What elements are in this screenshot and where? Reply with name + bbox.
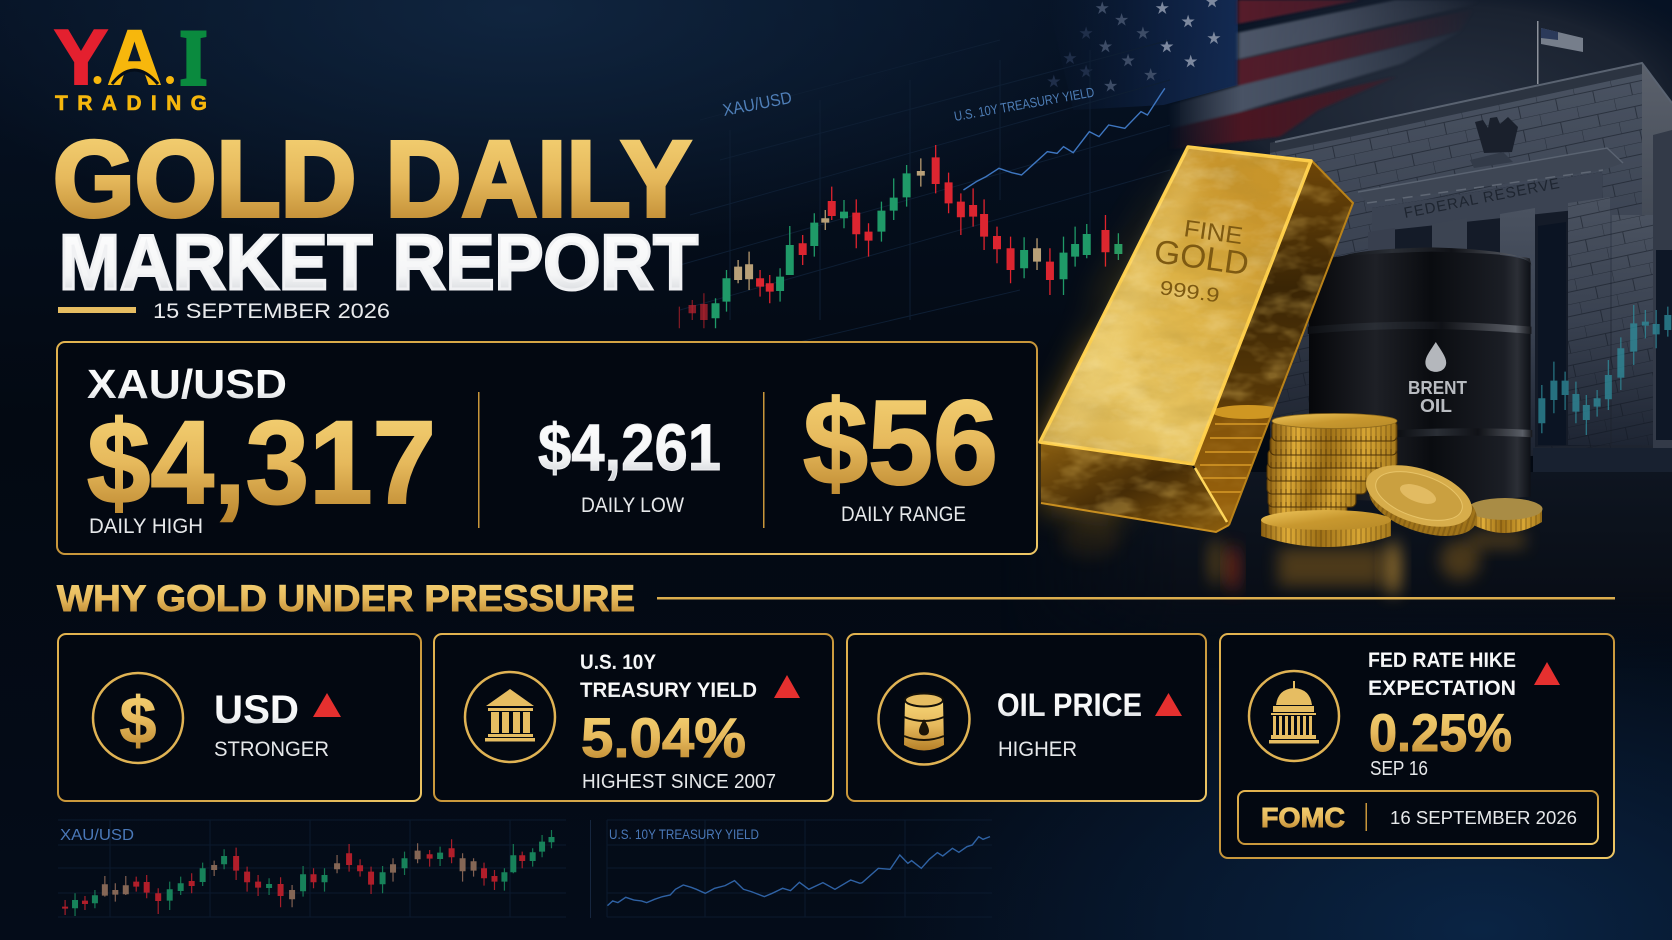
american flag backdrop	[1048, 0, 1672, 154]
flat front coin	[1261, 510, 1391, 547]
mini chart: XAU/USD	[58, 820, 566, 917]
small flag on roof	[1537, 21, 1583, 84]
higher label: HIGHER	[998, 738, 1077, 761]
divider 2	[763, 392, 764, 528]
yield value: 5.04%	[581, 706, 746, 769]
icon: barrel	[878, 674, 970, 764]
card: oil price	[847, 634, 1206, 801]
bar side face	[1193, 160, 1353, 528]
eagle statue	[1470, 117, 1518, 168]
candles	[65, 830, 551, 916]
daily low label: DAILY LOW	[581, 494, 684, 517]
yield line	[607, 837, 990, 906]
background chart: yield line	[963, 88, 1165, 190]
chart title: XAU/USD	[60, 827, 134, 844]
daily high label: DAILY HIGH	[89, 515, 203, 538]
portico	[1358, 148, 1672, 450]
card: USD	[58, 634, 421, 801]
gold coin stack	[1267, 414, 1397, 516]
icon: capitol	[1249, 671, 1339, 761]
chart title: U.S. 10Y TREASURY YIELD	[609, 826, 759, 842]
barrel label	[1408, 378, 1467, 416]
faded left candles	[679, 293, 704, 328]
logo: Y.A.I Trading: Y	[54, 13, 108, 101]
yield heading: TREASURY YIELD	[580, 679, 757, 702]
card: treasury yield	[434, 634, 833, 801]
oil barrel	[1308, 247, 1532, 502]
chart label: treasury yield: U.S. 10Y TREASURY YIELD	[953, 84, 1096, 124]
logo: Y.A.I Trading: A	[107, 13, 162, 101]
background chart: grid	[680, 40, 1170, 370]
daily high value: $4,317	[87, 397, 436, 529]
up arrow	[774, 675, 800, 698]
icon: dollar	[93, 673, 183, 763]
up arrow	[1155, 693, 1182, 716]
chart label: XAU/USD: XAU/USD	[721, 88, 793, 120]
rate value: 0.25%	[1369, 704, 1512, 763]
USD label: USD	[214, 688, 299, 732]
barrel label: BRENT	[1408, 378, 1467, 398]
card: fed rate hike	[1220, 634, 1614, 858]
bar engraving: 999.9	[1158, 277, 1221, 307]
divider 1	[478, 392, 480, 528]
stronger label: STRONGER	[214, 738, 329, 761]
barrel label: OIL	[1420, 396, 1452, 416]
fed heading	[1368, 649, 1516, 700]
federal reserve building	[1270, 21, 1672, 472]
divider between mini charts	[590, 820, 591, 918]
up arrow	[313, 693, 341, 717]
bar engraving: FINE	[1182, 215, 1244, 250]
fed heading: EXPECTATION	[1368, 677, 1516, 700]
logo: Y.A.I Trading	[54, 13, 207, 115]
logo: Y.A.I Trading: I	[180, 14, 207, 101]
FOMC badge: 16 SEPTEMBER 2026	[1390, 808, 1577, 828]
gold bar	[1040, 145, 1353, 532]
daily range value: $56	[803, 376, 998, 510]
floor with reflections	[1058, 472, 1672, 605]
bar bottom face	[1041, 442, 1229, 532]
XAU/USD label: XAU/USD	[87, 361, 287, 407]
oil price label: OIL PRICE	[997, 687, 1142, 723]
bar engraving	[1152, 215, 1251, 307]
yield note: HIGHEST SINCE 2007	[582, 771, 776, 793]
logo: Y.A.I Trading: TRADING	[55, 92, 207, 115]
title: market report: MARKET REPORT	[59, 218, 698, 306]
fed heading: FED RATE HIKE	[1368, 649, 1516, 672]
daily range label: DAILY RANGE	[841, 503, 966, 526]
standing coin	[1358, 453, 1485, 548]
date line: 15 SEPTEMBER 2026	[153, 300, 390, 323]
panel: daily prices	[57, 342, 1037, 554]
section heading: WHY GOLD UNDER PRESSURE	[57, 578, 635, 619]
flat right coin	[1468, 498, 1542, 533]
FOMC badge: FOMC	[1261, 802, 1345, 833]
background chart: XAU/USD candlesticks	[679, 145, 1118, 328]
date line	[58, 300, 390, 323]
title: gold daily: GOLD DAILY	[53, 118, 691, 239]
mini chart: treasury yield	[607, 820, 992, 917]
daily low value: $4,261	[538, 410, 721, 484]
yield heading: U.S. 10Y	[580, 651, 656, 674]
bar engraving: GOLD	[1152, 232, 1251, 282]
federal reserve lettering: FEDERAL RESERVE	[1403, 175, 1561, 222]
yield heading	[580, 651, 757, 702]
icon: bank	[465, 672, 555, 762]
bar front face	[1040, 147, 1311, 464]
icon: dollar: $	[120, 683, 156, 757]
up arrow	[1534, 662, 1560, 685]
FOMC badge	[1238, 791, 1598, 844]
rate date: SEP 16	[1370, 758, 1428, 780]
background chart: teal candles	[1542, 305, 1668, 435]
